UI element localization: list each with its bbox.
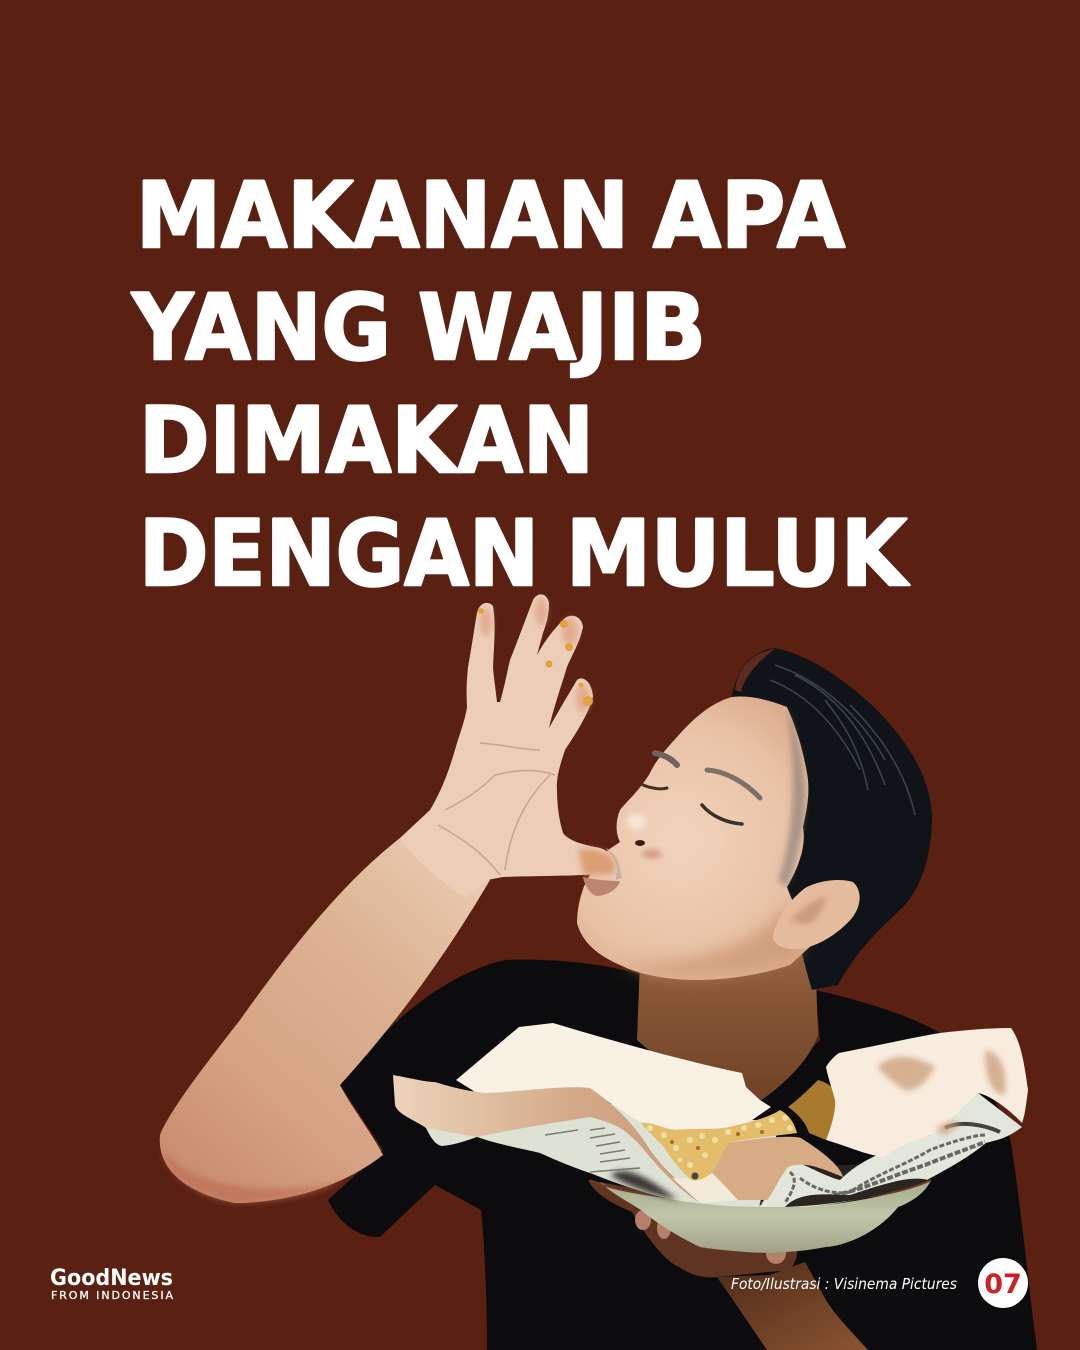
hair highlights [770,665,915,815]
rice dark bits [670,1130,764,1180]
logo: GoodNews from Indonesia: GoodNews [50,1266,173,1291]
title: APA [653,164,845,269]
face [577,697,812,980]
right white paper [826,1028,1028,1157]
fingers nails [635,1210,786,1264]
white inner flap [672,1173,740,1203]
page number badge [978,1258,1028,1308]
newspaper right dark [785,1179,928,1207]
eyes and brows [643,753,760,824]
title [131,164,910,607]
hair [720,648,932,990]
palm creases [438,743,555,875]
black t-shirt [328,960,1037,1350]
logo: GoodNews from Indonesia [50,1266,173,1302]
newspaper left print [545,1128,640,1172]
newspaper right [760,1093,1022,1207]
logo: GoodNews from Indonesia: FROM INDONESIA [51,1289,173,1302]
rice [641,1110,797,1181]
title: YANG [131,276,391,381]
centre tan flap [712,1137,843,1200]
neck [637,950,818,1107]
newspaper dark corner [610,1171,678,1200]
jaw shadow [620,900,800,977]
food on fingertips [478,608,593,706]
title: DIMAKAN [139,389,594,494]
rear white paper left [456,1023,771,1135]
ear [773,880,860,949]
page number badge: 07 [984,1269,1022,1300]
oily stain centre [788,1080,836,1140]
front tan flap left [393,1075,700,1203]
arm [160,820,490,1203]
forehead hair shadow [778,707,805,887]
elbow reddish rim [162,1150,345,1203]
hair top reddish rim [735,649,775,692]
hand [400,594,617,898]
nostril [635,840,645,846]
title: MULUK [566,502,910,607]
newspaper bottom-left [426,1100,780,1207]
photo credit: Foto/Ilustrasi : Visinema Pictures [731,1275,957,1293]
plate [600,1180,931,1253]
rice texture [647,1115,793,1168]
title: MAKANAN [136,164,629,269]
plate interior [610,1165,930,1206]
forearm holding plate [717,1262,868,1350]
nose bridge highlight [626,814,646,830]
lower lip [583,877,620,896]
plate rim [590,1180,931,1203]
ear inner [790,897,828,925]
paper stains right [877,1050,1006,1135]
fingertip shading [480,598,590,712]
title: WAJIB [418,276,706,381]
photo: person licking fingers [160,594,1037,1350]
thumb tip [578,849,615,875]
title: DENGAN [139,502,539,607]
upper lip [606,848,622,880]
nose shading [642,849,662,859]
newspaper right print [785,1124,1000,1203]
hand under plate [588,1180,797,1277]
